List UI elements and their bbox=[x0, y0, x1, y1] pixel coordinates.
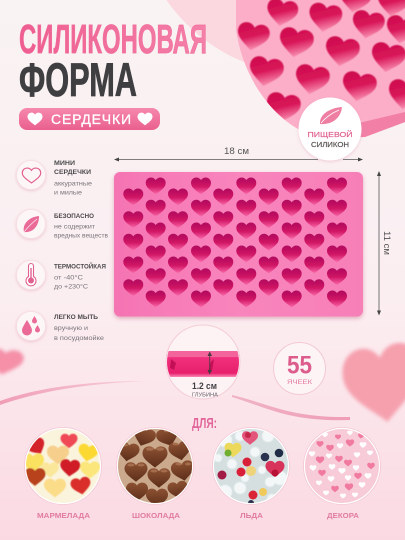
photo: chocolate bbox=[116, 424, 196, 507]
depth callout: ГЛУБИНА bbox=[192, 392, 218, 398]
icon: water drops bbox=[16, 312, 46, 340]
cells badge: 55: 55 bbox=[287, 352, 312, 380]
title: силиконовая: СИЛИКОНОВАЯ bbox=[19, 16, 207, 62]
depth callout bbox=[166, 325, 240, 399]
feature: mini hearts: МИНИ bbox=[54, 160, 75, 167]
label: marmalade: МАРМЕЛАДА bbox=[37, 511, 91, 520]
cells badge: 55: ЯЧЕЕК bbox=[287, 379, 312, 386]
silicone tray bbox=[114, 172, 363, 316]
feature: easy to wash bbox=[16, 312, 104, 342]
height dimension: 11 см bbox=[377, 171, 392, 316]
title: форма: ФОРМА bbox=[19, 53, 137, 106]
feature: safe: не содержит bbox=[54, 224, 95, 230]
heading: для: ДЛЯ: bbox=[192, 415, 217, 432]
icon: thermometer bbox=[16, 260, 46, 290]
heart cavities bbox=[123, 178, 347, 308]
height dimension: 11 см: 11 см bbox=[381, 231, 392, 255]
blurred heart right bbox=[340, 340, 405, 428]
feature: safe: БЕЗОПАСНО bbox=[54, 213, 94, 220]
feature: safe bbox=[16, 210, 108, 240]
photo: decor bbox=[304, 428, 380, 504]
feature: heat resistant: до +230°C bbox=[54, 282, 88, 290]
photo: marmalade bbox=[22, 428, 102, 504]
icon: heart outline bbox=[16, 160, 46, 190]
feature: easy to wash: в посудомойке bbox=[54, 334, 104, 342]
depth callout: 1.2 см bbox=[192, 381, 217, 392]
cells badge: 55 bbox=[274, 342, 326, 394]
feature: safe: вредных веществ bbox=[54, 232, 108, 240]
badge: food-grade silicone: ПИЩЕВОЙ bbox=[308, 130, 352, 139]
feature: easy to wash: вручную и bbox=[54, 325, 88, 332]
arrow: depth bbox=[208, 352, 212, 374]
decorative ribbon bbox=[0, 381, 350, 420]
label: chocolate: ШОКОЛАДА bbox=[132, 511, 181, 520]
feature: heat resistant: от -40°C bbox=[54, 274, 83, 282]
feature: easy to wash: ЛЕГКО МЫТЬ bbox=[54, 314, 98, 321]
photo: silicone mold close-up bbox=[230, 0, 405, 145]
badge: food-grade silicone bbox=[298, 98, 362, 160]
feature: mini hearts: аккуратные bbox=[54, 180, 92, 188]
feature: mini hearts bbox=[16, 160, 92, 196]
top-right backdrop circle bbox=[135, 0, 405, 75]
pill: сердечки bbox=[19, 108, 160, 130]
label: decor: ДЕКОРА bbox=[327, 511, 360, 520]
blurred heart left bbox=[0, 347, 25, 377]
badge: food-grade silicone: СИЛИКОН bbox=[311, 142, 349, 149]
width dimension: 18 см bbox=[114, 146, 363, 162]
feature: mini hearts: и милые bbox=[54, 190, 82, 196]
width dimension: 18 см: 18 см bbox=[224, 146, 249, 157]
feature: heat resistant bbox=[16, 260, 106, 290]
photo: ice bbox=[212, 428, 290, 506]
icon: leaf bbox=[16, 210, 46, 238]
pill: сердечки: СЕРДЕЧКИ bbox=[51, 111, 131, 127]
feature: mini hearts: СЕРДЕЧКИ bbox=[54, 169, 91, 176]
feature: heat resistant: ТЕРМОСТОЙКАЯ bbox=[54, 262, 106, 270]
label: ice: ЛЬДА bbox=[240, 511, 264, 520]
